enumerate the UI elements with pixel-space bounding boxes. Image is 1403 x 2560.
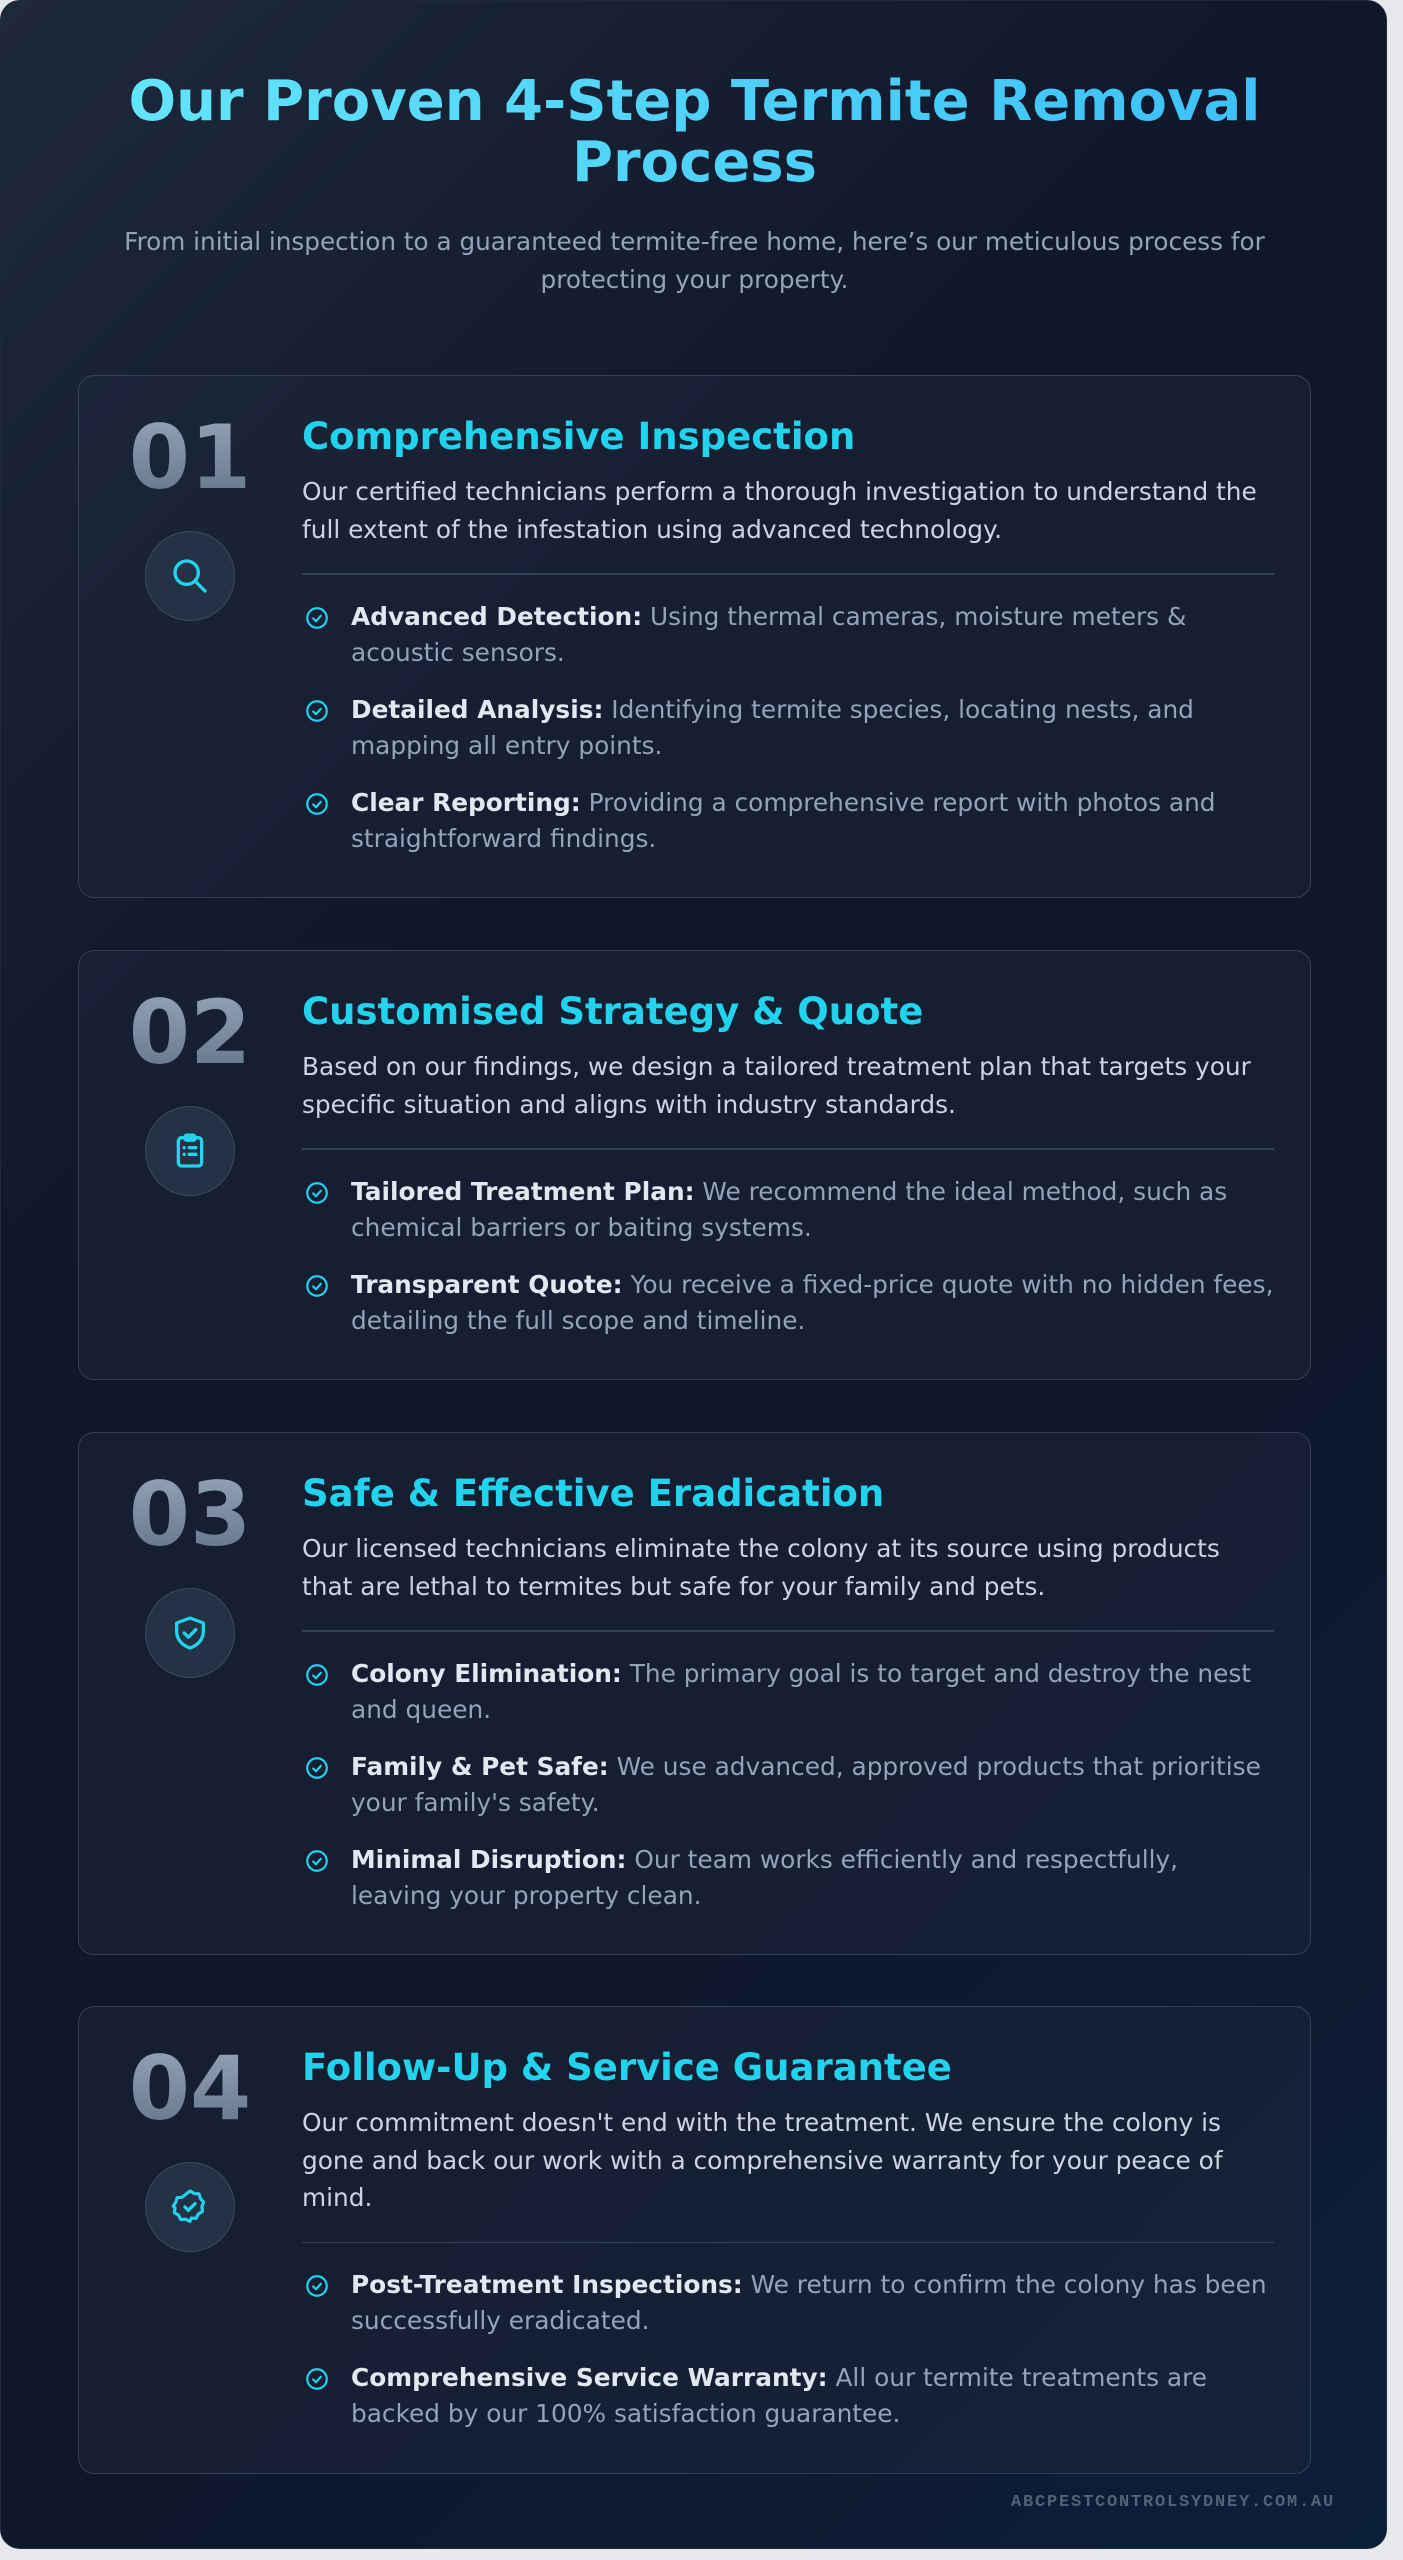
step number 03: 03 (129, 1463, 251, 1566)
step 2 content: Based on our findings, we design a tailored treatment plan that targets your (302, 1052, 1251, 1081)
step 4 content: backed by our 100% satisfaction guarantee. (351, 2399, 900, 2428)
footer url: ABCPESTCONTROLSYDNEY.COM.AU (1011, 2493, 1335, 2512)
icon: clipboard (145, 1106, 235, 1196)
step 4 content: Comprehensive Service Warranty: All our termite treatments are (351, 2363, 1207, 2392)
step 4 content (302, 2046, 1274, 2428)
step 4 content: gone and back our work with a comprehensive warranty for your peace of (302, 2146, 1223, 2174)
step 3 content (302, 1472, 1274, 1910)
step 4 content: successfully eradicated. (351, 2306, 649, 2335)
title: Our Proven 4-Step Termite Removal (128, 69, 1260, 134)
step 1 content (302, 415, 1274, 852)
icon: magnifier (145, 531, 235, 621)
step 4 content: Our commitment doesn't end with the treatment. We ensure the colony is (302, 2108, 1221, 2137)
step 2 content: Transparent Quote: You receive a fixed-price quote with no hidden fees, (351, 1270, 1273, 1298)
step 3 content: Family & Pet Safe: We use advanced, approved products that prioritise (351, 1752, 1261, 1780)
step 1 content: Advanced Detection: Using thermal cameras, moisture meters & (351, 602, 1186, 630)
step 1 content: straightforward findings. (351, 824, 656, 852)
panel: step 2 (78, 950, 1311, 1380)
step 1 content: full extent of the infestation using advanced technology. (302, 514, 1002, 544)
step number 02: 02 (129, 981, 251, 1084)
step number 04: 04 (129, 2037, 251, 2140)
step 3 content: Colony Elimination: The primary goal is to target and destroy the nest (351, 1658, 1251, 1688)
step 1 content: Comprehensive Inspection (302, 415, 855, 458)
step 1 content: Our certified technicians perform a thorough investigation to understand the (302, 477, 1257, 506)
step 3 content: leaving your property clean. (351, 1880, 702, 1910)
step 2 content: Customised Strategy & Quote (302, 990, 923, 1033)
step 2 content: specific situation and aligns with industry standards. (302, 1090, 956, 1118)
step 3 content: Safe & Effective Eradication (302, 1472, 884, 1515)
step 3 content: and queen. (351, 1694, 491, 1724)
step 1 content: Detailed Analysis: Identifying termite species, locating nests, and (351, 694, 1194, 724)
panel: step 4 (78, 2006, 1311, 2474)
step number 01: 01 (129, 406, 251, 509)
step 3 content: Our licensed technicians eliminate the colony at its source using products (302, 1534, 1220, 1563)
step 4 content: Follow-Up & Service Guarantee (302, 2046, 952, 2089)
icon: badge check (145, 2162, 235, 2252)
step 4 content: Post-Treatment Inspections: We return to confirm the colony has been (351, 2270, 1267, 2299)
panel: step 1 (78, 375, 1311, 898)
step 2 content: detailing the full scope and timeline. (351, 1306, 805, 1334)
panel: step 3 (78, 1432, 1311, 1955)
step 2 content: chemical barriers or baiting systems. (351, 1212, 812, 1242)
subtitle: From initial inspection to a guaranteed termite-free home, here’s our meticulous process for (124, 227, 1265, 256)
step 3 content: that are lethal to termites but safe for your family and pets. (302, 1572, 1045, 1600)
step 1 content: acoustic sensors. (351, 638, 565, 666)
step 4 content: mind. (302, 2183, 372, 2212)
step 1 content: mapping all entry points. (351, 730, 662, 760)
step 2 content (302, 990, 1274, 1334)
step 2 content: Tailored Treatment Plan: We recommend the ideal method, such as (351, 1176, 1227, 1206)
icon: shield check (145, 1588, 235, 1678)
title: Process (572, 130, 817, 195)
subtitle: protecting your property. (541, 264, 848, 294)
step 3 content: Minimal Disruption: Our team works efficiently and respectfully, (351, 1844, 1178, 1874)
step 3 content: your family's safety. (351, 1788, 600, 1816)
step 1 content: Clear Reporting: Providing a comprehensive report with photos and (351, 788, 1216, 816)
subtitle (124, 227, 1265, 294)
title (1, 71, 1388, 193)
